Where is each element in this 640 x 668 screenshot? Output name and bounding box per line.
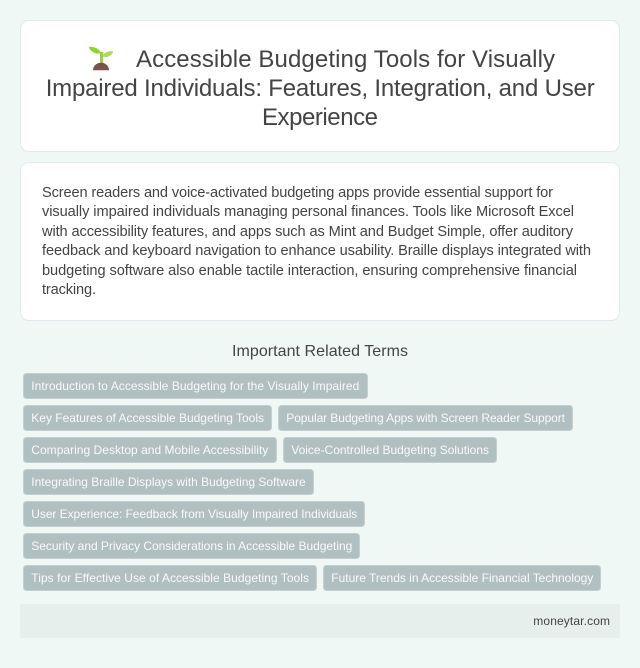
panel: title xyxy=(20,20,620,152)
chip: Security and Privacy Considerations in Accessible Budgeting xyxy=(31,539,352,553)
summary text xyxy=(41,185,591,298)
summary text: visually impaired individuals managing personal finances. Tools like Microsoft Excel xyxy=(42,204,574,220)
footer source: moneytar.com xyxy=(533,614,610,628)
title xyxy=(46,46,595,131)
chip: Integrating Braille Displays with Budgeting Software xyxy=(31,475,306,489)
chip xyxy=(24,502,364,526)
chip: Popular Budgeting Apps with Screen Reader Support xyxy=(286,411,566,425)
chip: Future Trends in Accessible Financial Technology xyxy=(331,571,593,585)
footer xyxy=(20,604,620,638)
title: Accessible Budgeting Tools for Visually xyxy=(136,46,555,73)
summary text: tracking. xyxy=(42,282,96,298)
chip: Tips for Effective Use of Accessible Budgeting Tools xyxy=(31,571,309,585)
chip xyxy=(24,406,272,430)
chip: Voice-Controlled Budgeting Solutions xyxy=(291,443,489,457)
chip: Comparing Desktop and Mobile Accessibility xyxy=(31,443,268,457)
chip xyxy=(24,374,368,398)
chip xyxy=(24,566,316,590)
chip xyxy=(284,438,496,462)
summary text: budgeting software also enable tactile interaction, ensuring comprehensive financial xyxy=(42,263,577,279)
chip: User Experience: Feedback from Visually Impaired Individuals xyxy=(31,507,357,521)
heading: related terms: Important Related Terms xyxy=(232,343,408,360)
icon: seedling xyxy=(89,47,113,70)
term chips xyxy=(24,374,600,590)
summary text: feedback and keyboard navigation to enhance usability. Braille displays integrated with xyxy=(42,243,591,259)
chip xyxy=(24,438,276,462)
panel: summary xyxy=(20,162,620,320)
chip xyxy=(278,406,572,430)
title: Experience xyxy=(262,104,378,131)
chip xyxy=(24,534,360,558)
chip: Key Features of Accessible Budgeting Tools xyxy=(31,411,264,425)
summary text: with accessibility features, and apps such as Mint and Budget Simple, offer auditory xyxy=(41,224,574,240)
chip xyxy=(324,566,600,590)
title: Impaired Individuals: Features, Integration, and User xyxy=(46,75,595,102)
chip xyxy=(24,470,314,494)
chip: Introduction to Accessible Budgeting for the Visually Impaired xyxy=(31,379,359,393)
summary text: Screen readers and voice-activated budgeting apps provide essential support for xyxy=(42,185,553,201)
